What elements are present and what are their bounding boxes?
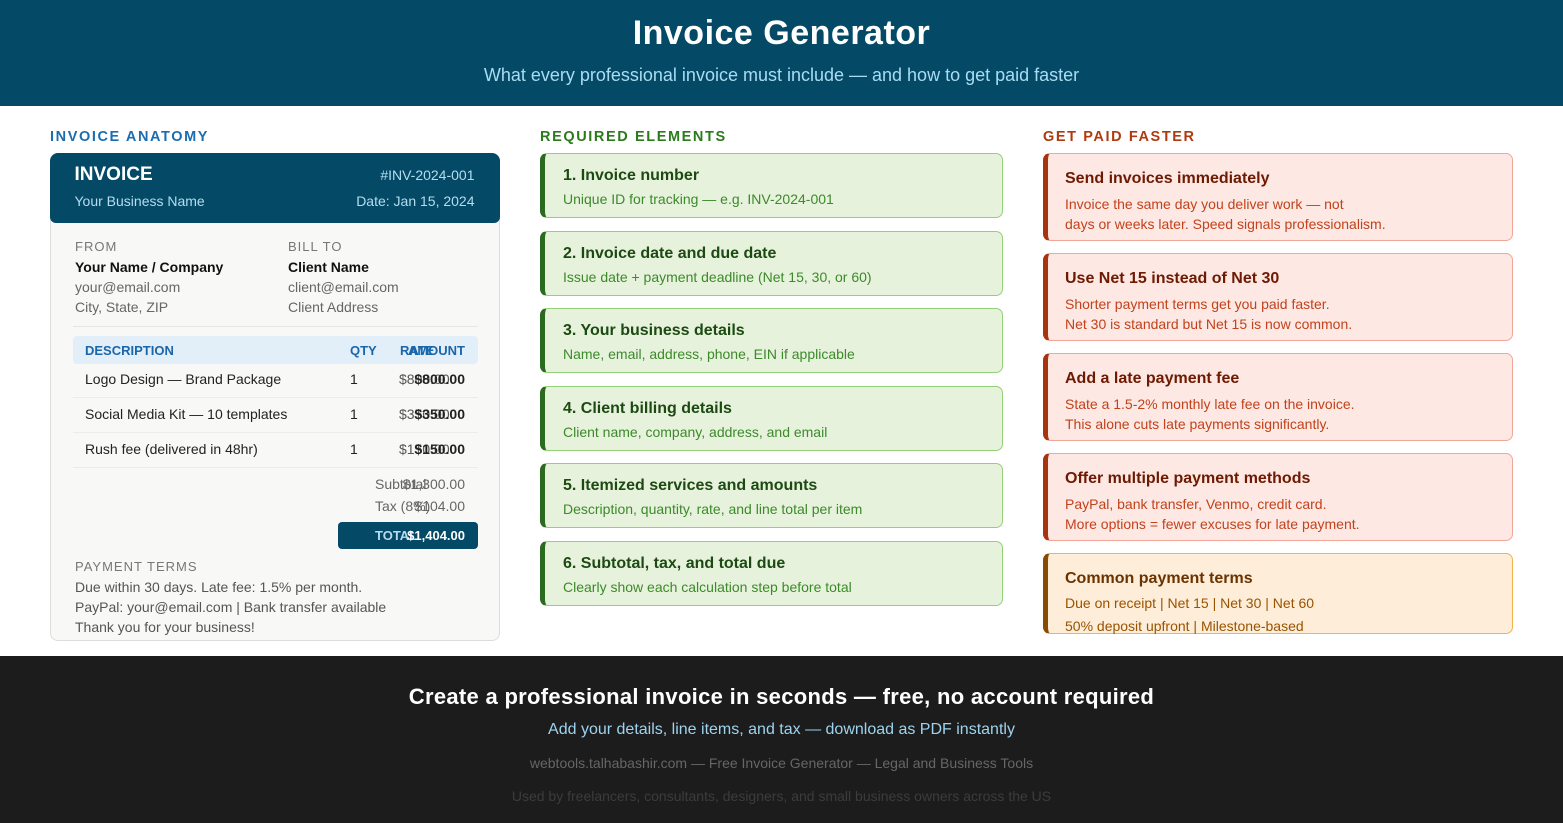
card: totals: [540, 541, 1003, 606]
line items table: $1,300.00: [403, 476, 465, 492]
line items table: $350.00: [414, 406, 465, 422]
line items table: $800.00: [399, 371, 450, 387]
card: client billing: Client name, company, address, and email: [563, 424, 827, 440]
tip: send immediately: Send invoices immediately: [1065, 170, 1270, 187]
line items table: Subtotal: [375, 476, 426, 492]
tip: payment methods: [1043, 453, 1513, 541]
from block: Your Name / Company: [75, 259, 223, 275]
bill to block: Client Address: [288, 299, 378, 315]
total box: TOTAL: [375, 528, 417, 543]
invoice header: INVOICE: [74, 164, 153, 184]
line items table: $150.00: [399, 441, 450, 457]
line items table: QTY: [350, 343, 377, 358]
heading: get paid faster: GET PAID FASTER: [1043, 129, 1196, 145]
line items table: $150.00: [414, 441, 465, 457]
tip: late fee: Add a late payment fee: [1065, 370, 1239, 387]
payment terms: Thank you for your business!: [75, 619, 255, 635]
from block: FROM: [75, 239, 117, 254]
footer: [0, 656, 1563, 823]
payment terms: [75, 559, 386, 635]
heading: invoice anatomy: INVOICE ANATOMY: [50, 129, 209, 145]
line items table: $800.00: [414, 371, 465, 387]
tip: late fee: State a 1.5-2% monthly late fee on the invoice.: [1065, 396, 1355, 412]
tip: common payment terms: [1043, 553, 1513, 634]
from block: City, State, ZIP: [75, 299, 168, 315]
card: totals: Clearly show each calculation step before total: [563, 579, 852, 595]
tip: common payment terms: Due on receipt | Net 15 | Net 30 | Net 60: [1065, 595, 1314, 611]
bill to block: [288, 239, 399, 315]
payment terms: PayPal: your@email.com | Bank transfer available: [75, 599, 386, 615]
line items table: Rush fee (delivered in 48hr): [85, 441, 258, 457]
from block: your@email.com: [75, 279, 180, 295]
tip: common payment terms: 50% deposit upfront | Milestone-based: [1065, 618, 1304, 634]
tip: net 15: Use Net 15 instead of Net 30: [1065, 270, 1279, 287]
card: invoice number: Unique ID for tracking — e.g. INV-2024-001: [563, 191, 834, 207]
line items table: 1: [350, 371, 358, 387]
line items table: [73, 336, 478, 549]
panel: invoice card: [50, 153, 500, 641]
card: client billing: [540, 386, 1003, 451]
tip: payment methods: More options = fewer excuses for late payment.: [1065, 516, 1360, 532]
tip: payment methods: PayPal, bank transfer, Venmo, credit card.: [1065, 496, 1326, 512]
footer note: Used by freelancers, consultants, designers, and small business owners across the US: [512, 788, 1051, 804]
bill to block: client@email.com: [288, 279, 399, 295]
payment terms: PAYMENT TERMS: [75, 559, 198, 574]
line items table: $350.00: [399, 406, 450, 422]
line items table: 1: [350, 441, 358, 457]
card: dates: [540, 231, 1003, 296]
line items table: Social Media Kit — 10 templates: [85, 406, 287, 422]
card: business details: [540, 308, 1003, 373]
tip: payment methods: Offer multiple payment methods: [1065, 470, 1310, 487]
tip: net 15: [1043, 253, 1513, 341]
card: business details: Name, email, address, phone, EIN if applicable: [563, 346, 855, 362]
footer title: Create a professional invoice in seconds — free, no account required: [409, 684, 1154, 709]
card: invoice number: 1. Invoice number: [563, 167, 699, 184]
invoice header: #INV-2024-001: [380, 166, 474, 182]
bill to block: BILL TO: [288, 239, 342, 254]
card: invoice number: [540, 153, 1003, 218]
line items table: RATE: [400, 343, 434, 358]
invoice header: [50, 152, 500, 222]
payment terms: Due within 30 days. Late fee: 1.5% per month.: [75, 579, 362, 595]
line items table: AMOUNT: [408, 343, 465, 358]
footer subtitle: Add your details, line items, and tax — download as PDF instantly: [548, 721, 1015, 738]
bill to block: Client Name: [288, 259, 369, 275]
line items table: Logo Design — Brand Package: [85, 371, 281, 387]
total box: [338, 522, 478, 549]
line items table: Tax (8%): [375, 498, 430, 514]
card: client billing: 4. Client billing details: [563, 400, 732, 417]
card: totals: 6. Subtotal, tax, and total due: [563, 555, 785, 572]
tip: send immediately: Invoice the same day you deliver work — not: [1065, 196, 1344, 212]
tip: late fee: [1043, 353, 1513, 441]
footer source: webtools.talhabashir.com — Free Invoice Generator — Legal and Business Tools: [530, 755, 1033, 771]
tip: late fee: This alone cuts late payments significantly.: [1065, 416, 1329, 432]
card: itemized: Description, quantity, rate, and line total per item: [563, 501, 862, 517]
line items table: 1: [350, 406, 358, 422]
tip: net 15: Shorter payment terms get you paid faster.: [1065, 296, 1330, 312]
tip: common payment terms: Common payment terms: [1065, 570, 1253, 587]
card: business details: 3. Your business details: [563, 322, 745, 339]
card: dates: Issue date + payment deadline (Net 15, 30, or 60): [563, 269, 872, 285]
subtitle: What every professional invoice must include — and how to get paid faster: [484, 65, 1079, 85]
card: dates: 2. Invoice date and due date: [563, 245, 776, 262]
tip: send immediately: days or weeks later. Speed signals professionalism.: [1065, 216, 1386, 232]
total box: $1,404.00: [407, 528, 465, 543]
from block: [75, 239, 224, 315]
title: Invoice Generator: [633, 14, 930, 52]
tip: net 15: Net 30 is standard but Net 15 is now common.: [1065, 316, 1352, 332]
line items table: $104.00: [414, 498, 465, 514]
header: [0, 0, 1563, 106]
invoice header: Date: Jan 15, 2024: [356, 192, 474, 208]
card: itemized: [540, 463, 1003, 528]
tip: send immediately: [1043, 153, 1513, 241]
card: itemized: 5. Itemized services and amounts: [563, 477, 817, 494]
heading: required elements: REQUIRED ELEMENTS: [540, 129, 727, 145]
invoice header: Your Business Name: [74, 192, 205, 208]
line items table: DESCRIPTION: [85, 343, 174, 358]
